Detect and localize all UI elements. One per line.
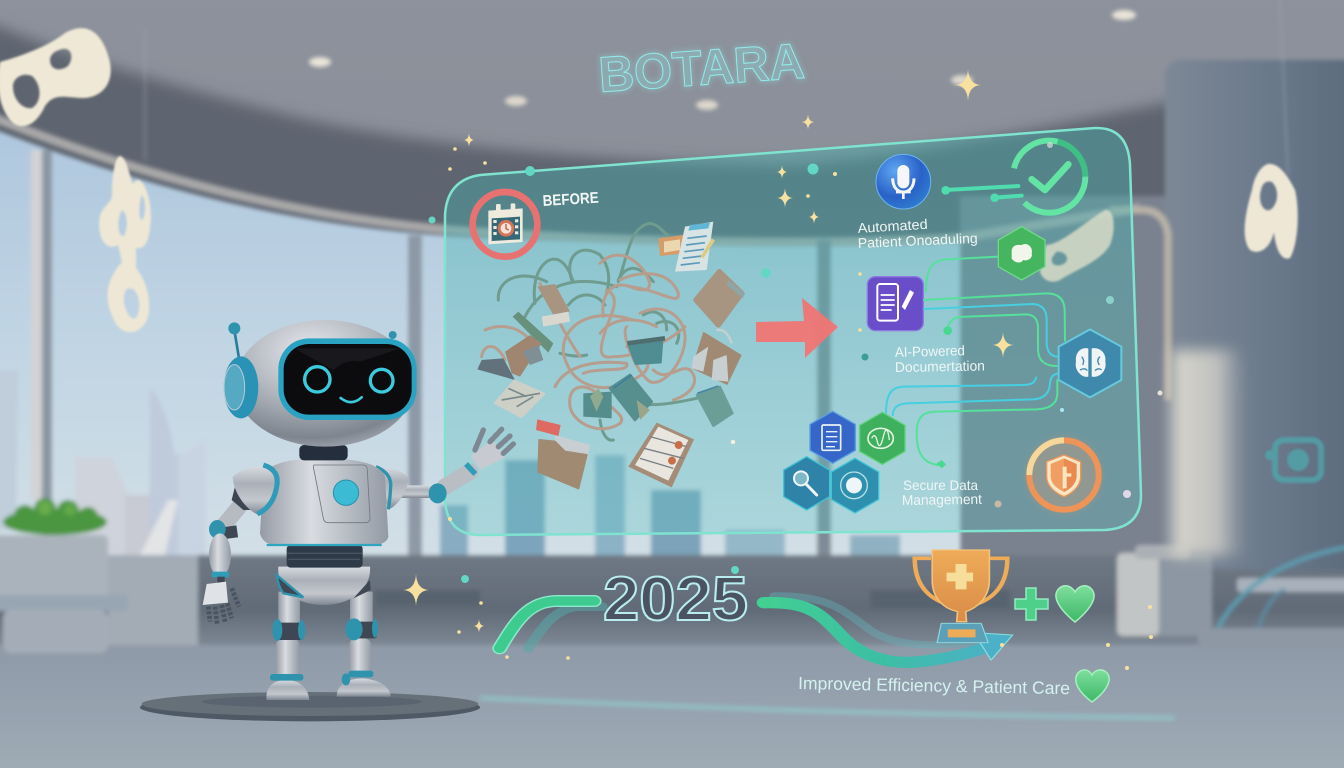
legs — [266, 592, 391, 700]
timeline to 2025 — [500, 596, 1013, 662]
face screen — [278, 338, 417, 420]
label: AI-powered documentation: Documertation — [895, 357, 985, 375]
label: before: BEFORE — [542, 190, 599, 210]
ear — [224, 356, 258, 418]
icon: security shield ring — [1025, 436, 1103, 514]
plus icon — [1015, 588, 1048, 620]
pelvis and waist — [277, 545, 371, 605]
heart icon small — [1076, 670, 1109, 702]
label: AI-powered documentation — [895, 342, 985, 375]
label: automated patient onboarding: Automated — [857, 216, 928, 236]
hanging mask decoration: top left — [0, 28, 111, 126]
outcome caption: Improved Efficiency & Patient Care — [798, 673, 1070, 698]
trophy — [915, 550, 1007, 643]
label: secure data management: Secure Data — [903, 477, 978, 493]
swoosh left — [500, 601, 602, 648]
title: BOTARA: BOTARA — [597, 33, 806, 103]
label: automated patient onboarding: Patient Onoaduling — [857, 230, 978, 251]
icon: check ring — [1014, 141, 1085, 213]
mask seen through panel — [1040, 210, 1114, 282]
transition arrow — [756, 298, 838, 358]
label: AI-powered documentation: AI-Powered — [895, 342, 965, 360]
panel: after state — [784, 141, 1121, 514]
hanging mask decoration: right — [1245, 164, 1298, 259]
icon: AI brain hex — [1059, 329, 1121, 397]
connector lines to check — [941, 186, 1022, 202]
icon: microphone — [876, 154, 931, 209]
connectors from document — [886, 257, 1065, 468]
icon: green hex — [998, 227, 1045, 280]
hexagon cluster — [784, 411, 905, 513]
label: automated patient onboarding — [857, 216, 978, 251]
floor glow line — [480, 698, 1175, 718]
right arm — [376, 429, 513, 509]
icon: document tablet — [867, 277, 923, 331]
head — [235, 320, 415, 447]
robot character — [140, 320, 513, 721]
sparkles and particles — [403, 69, 1162, 670]
year: 2025: 2025 — [603, 565, 748, 634]
eyes — [305, 367, 330, 392]
chest button — [333, 480, 359, 505]
swoosh right arrow — [764, 596, 1013, 662]
platform — [140, 692, 480, 721]
label: secure data management — [902, 477, 982, 508]
tangled wires — [482, 223, 697, 440]
hanging mask decoration: window — [99, 156, 151, 332]
neck — [299, 445, 348, 460]
left arm — [203, 480, 252, 625]
label: secure data management: Management — [902, 491, 982, 508]
faded wall icon — [1265, 440, 1321, 480]
torso — [233, 458, 388, 545]
panel: before state — [473, 192, 745, 488]
smile — [341, 397, 362, 402]
antenna — [228, 322, 397, 358]
icon: calendar in red ring — [473, 192, 537, 257]
heart icon — [1056, 586, 1094, 622]
glass panel — [445, 128, 1141, 535]
scattered files and folders — [477, 222, 745, 488]
